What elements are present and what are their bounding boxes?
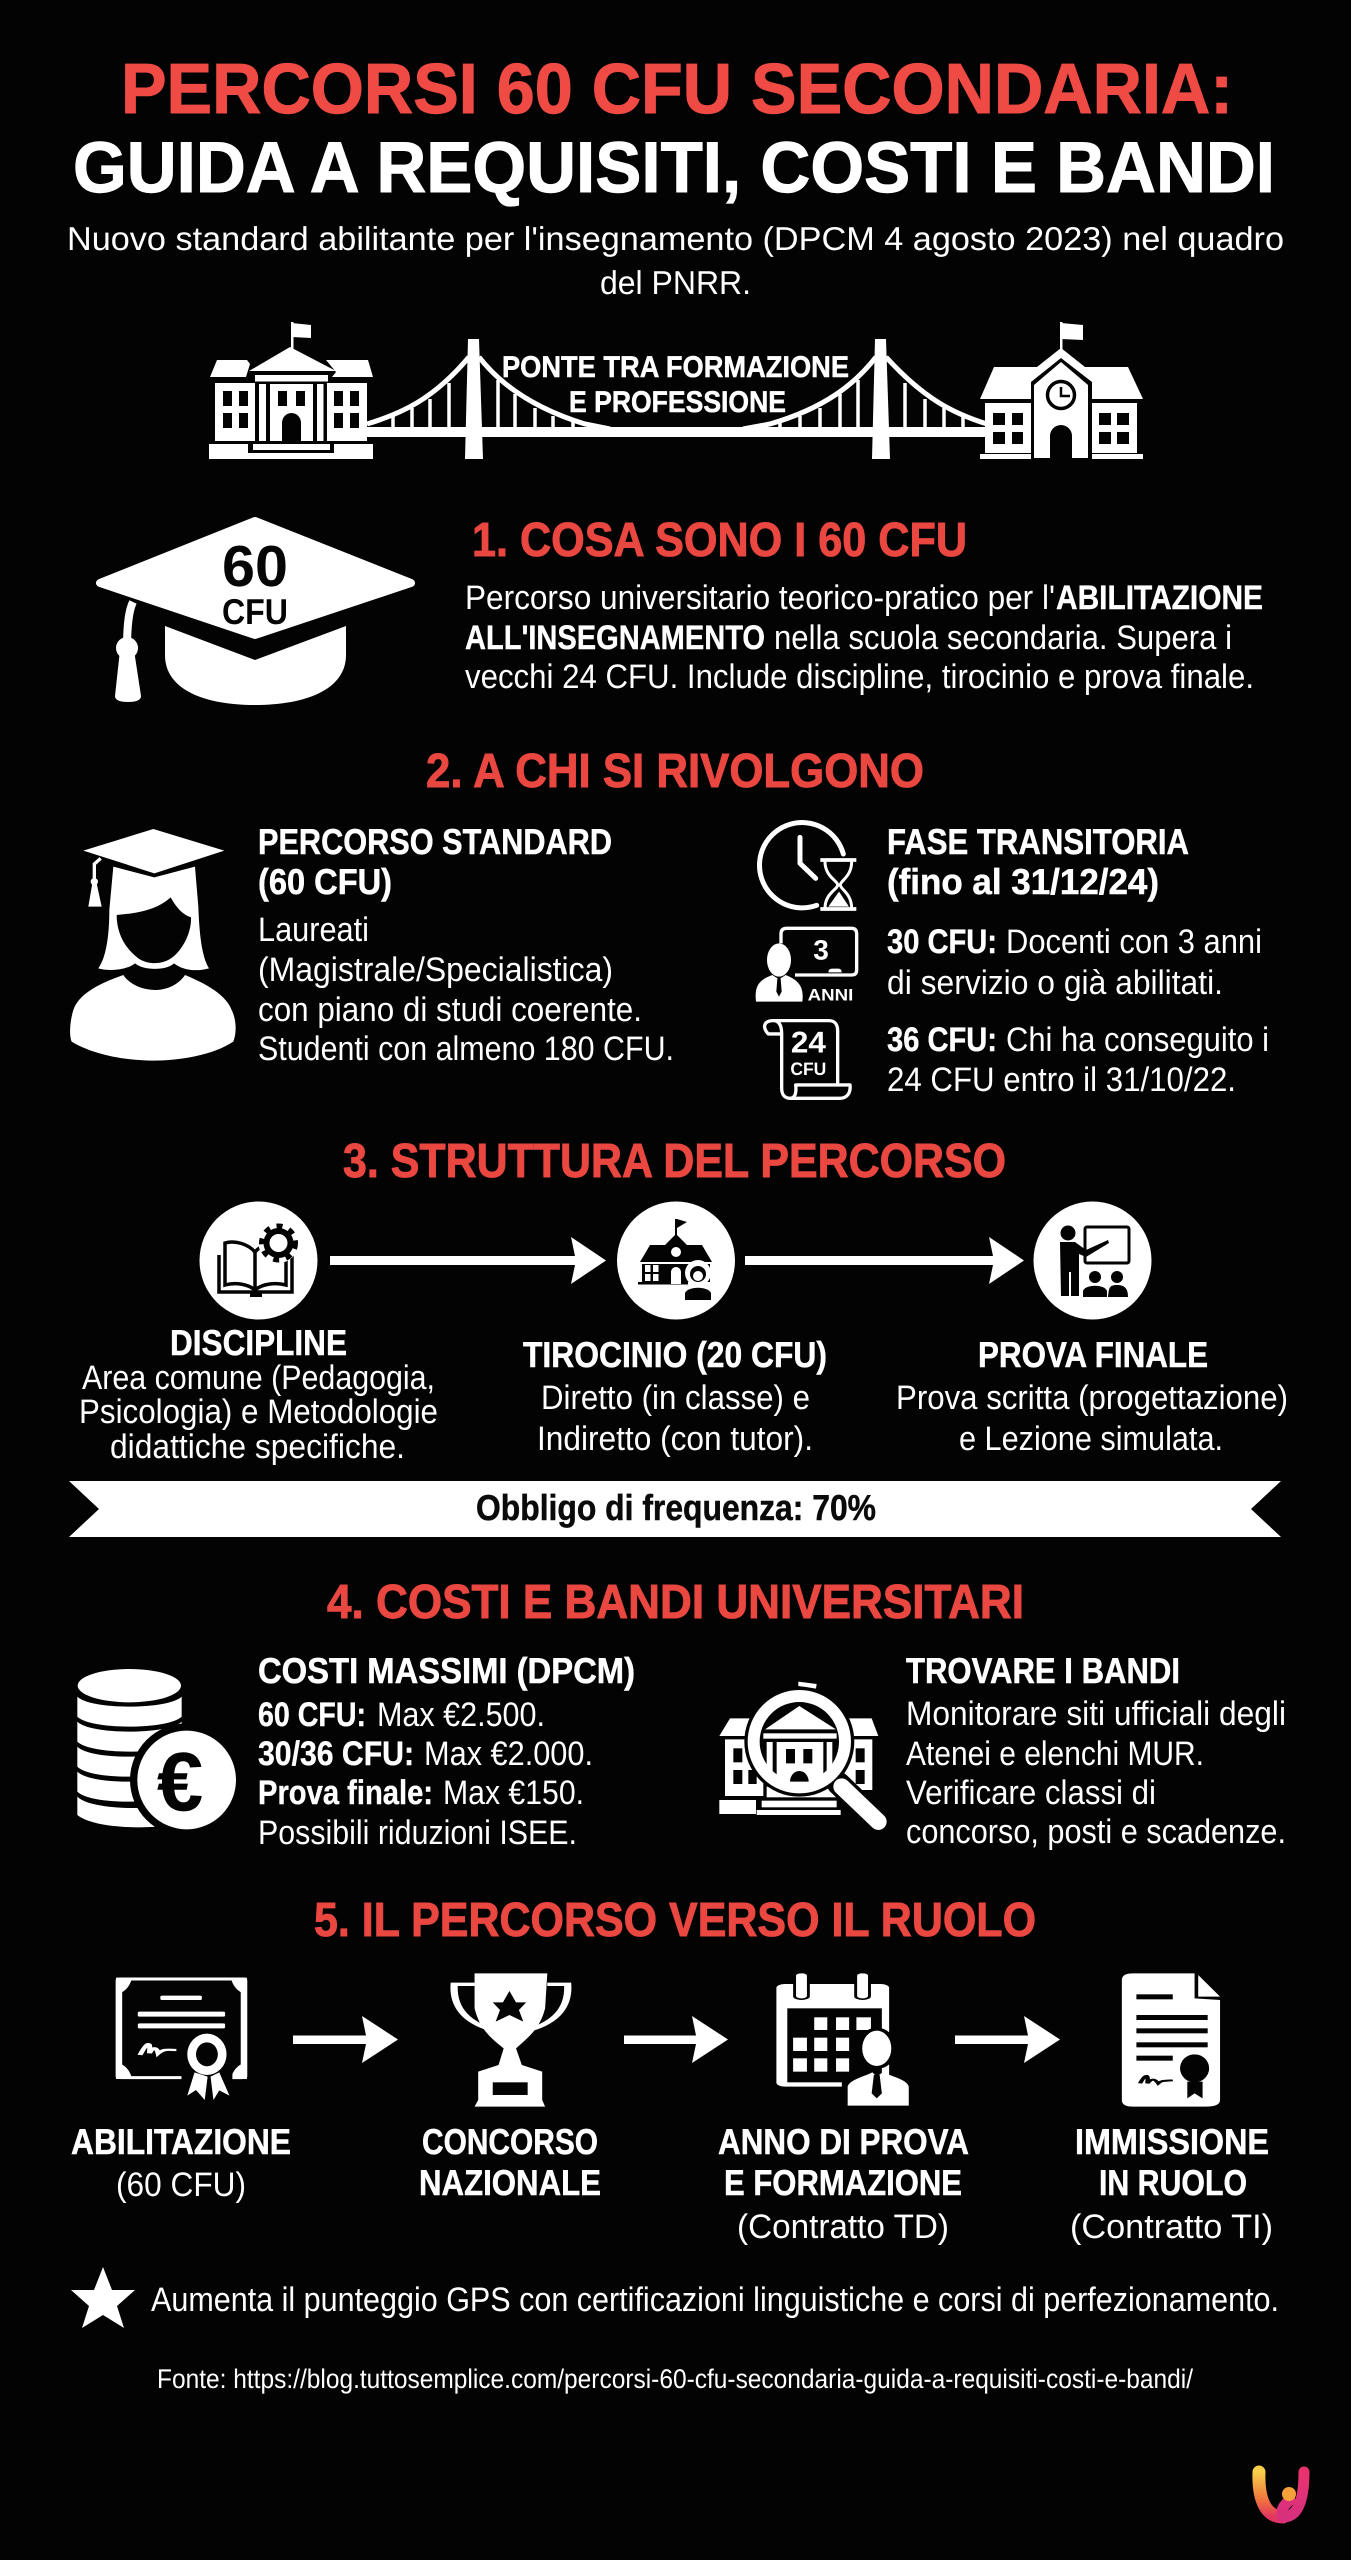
panel: percorso standard: PERCORSO STANDARD bbox=[258, 821, 612, 862]
heading 2: 2. A CHI SI RIVOLGONO bbox=[426, 745, 924, 798]
title bbox=[73, 50, 1275, 208]
icon: bridge between university and school bbox=[209, 322, 1143, 459]
description 1: nella scuola secondaria. Supera i bbox=[774, 619, 1232, 657]
step: discipline bbox=[79, 1322, 438, 1466]
icon: coins with euro: € bbox=[157, 1735, 203, 1828]
step: abilitazione: ABILITAZIONE bbox=[71, 2121, 291, 2162]
section 3 bbox=[69, 1135, 1288, 1537]
section 5 bbox=[71, 1894, 1273, 2246]
icon: suspension bridge bbox=[367, 339, 987, 459]
panel: percorso standard: (Magistrale/Specialistica) bbox=[258, 951, 613, 989]
step: abilitazione bbox=[71, 2121, 291, 2204]
subtitle: Nuovo standard abilitante per l'insegnamento (DPCM 4 agosto 2023) nel quadro bbox=[67, 220, 1284, 257]
section 1 bbox=[100, 514, 1263, 705]
icon: teacher 3 anni: ANNI bbox=[808, 986, 853, 1004]
icon: teacher at board bbox=[1034, 1202, 1152, 1320]
panel: trovare i bandi: Monitorare siti ufficiali degli bbox=[906, 1695, 1286, 1733]
step: tirocinio: Indiretto (con tutor). bbox=[537, 1420, 813, 1458]
heading 4: 4. COSTI E BANDI UNIVERSITARI bbox=[327, 1576, 1024, 1629]
icon: graduate woman bbox=[70, 829, 236, 1061]
step: immissione: IN RUOLO bbox=[1099, 2162, 1247, 2203]
icon: coins with euro bbox=[77, 1669, 243, 1837]
step: tirocinio bbox=[523, 1334, 827, 1458]
bridge label: E PROFESSIONE bbox=[569, 386, 786, 419]
description 1: ABILITAZIONE bbox=[1056, 579, 1263, 617]
panel: costi massimi: Max €150. bbox=[443, 1774, 584, 1812]
step: immissione: IMMISSIONE bbox=[1075, 2121, 1269, 2162]
panel: costi massimi: Max €2.500. bbox=[377, 1696, 545, 1734]
bridge label: PONTE TRA FORMAZIONE bbox=[502, 351, 849, 384]
panel: trovare i bandi: TROVARE I BANDI bbox=[906, 1650, 1180, 1691]
icon: star bbox=[71, 2267, 135, 2328]
step: immissione bbox=[1070, 2121, 1273, 2246]
arrow bbox=[624, 2016, 728, 2063]
description 1: vecchi 24 CFU. Include discipline, tirocinio e prova finale. bbox=[465, 658, 1254, 696]
step: concorso: NAZIONALE bbox=[419, 2162, 601, 2203]
panel: fase transitoria: di servizio o già abilitati. bbox=[887, 964, 1223, 1002]
panel: fase transitoria: (fino al 31/12/24) bbox=[887, 861, 1159, 902]
panel: fase transitoria: FASE TRANSITORIA bbox=[887, 821, 1189, 862]
icon: graduation cap 60 CFU: 60 bbox=[222, 534, 288, 599]
icon: graduation cap 60 CFU: CFU bbox=[222, 591, 288, 632]
arrow bbox=[293, 2016, 398, 2063]
step: prova finale: PROVA FINALE bbox=[978, 1334, 1208, 1375]
step: discipline: Area comune (Pedagogia, bbox=[82, 1359, 435, 1397]
icon: magnifier on university bbox=[719, 1682, 878, 1822]
panel: fase transitoria: Chi ha conseguito i bbox=[1006, 1021, 1269, 1059]
description 1: ALL'INSEGNAMENTO bbox=[465, 619, 765, 657]
icon: university bbox=[209, 322, 373, 459]
panel: percorso standard: (60 CFU) bbox=[258, 861, 392, 902]
panel: percorso standard: Laureati bbox=[258, 911, 369, 949]
panel: percorso standard: con piano di studi coerente. bbox=[258, 991, 642, 1029]
icon: scroll 24 CFU: CFU bbox=[790, 1059, 826, 1079]
icon: clock and hourglass bbox=[759, 823, 856, 909]
source: Fonte: https://blog.tuttosemplice.com/percorsi-60-cfu-secondaria-guida-a-requisiti-costi-e-bandi/ bbox=[157, 2364, 1193, 2394]
step: prova finale bbox=[896, 1334, 1288, 1458]
heading 1: 1. COSA SONO I 60 CFU bbox=[472, 514, 967, 567]
icon: scroll 24 CFU bbox=[765, 1021, 850, 1098]
heading 3: 3. STRUTTURA DEL PERCORSO bbox=[343, 1135, 1006, 1188]
icon: signed contract bbox=[1122, 1973, 1220, 2107]
step: abilitazione: (60 CFU) bbox=[116, 2166, 246, 2204]
step: discipline: Psicologia) e Metodologie bbox=[79, 1393, 438, 1431]
panel: fase transitoria: 36 CFU: bbox=[887, 1021, 997, 1059]
step: prova finale: e Lezione simulata. bbox=[959, 1420, 1223, 1458]
description 1 bbox=[465, 579, 1263, 696]
panel: costi massimi: Max €2.000. bbox=[424, 1735, 593, 1773]
title: PERCORSI 60 CFU SECONDARIA: bbox=[121, 50, 1233, 129]
icon: tirocinio school and person bbox=[617, 1202, 735, 1320]
step: discipline: DISCIPLINE bbox=[170, 1322, 347, 1363]
icon: graduation cap 60 CFU bbox=[100, 521, 411, 705]
panel: costi massimi bbox=[258, 1650, 635, 1852]
section 4 bbox=[77, 1576, 1286, 1852]
ribbon: obbligo di frequenza: Obbligo di frequenza: 70% bbox=[476, 1487, 876, 1528]
icon: discipline book and gear bbox=[200, 1202, 318, 1320]
panel: fase transitoria: 30 CFU: bbox=[887, 923, 997, 961]
step: anno di prova bbox=[718, 2121, 969, 2246]
section 2 bbox=[70, 745, 1269, 1099]
icon: trophy bbox=[454, 1973, 568, 2107]
step: anno di prova: E FORMAZIONE bbox=[724, 2162, 962, 2203]
panel: costi massimi: 60 CFU: bbox=[258, 1696, 366, 1734]
step: anno di prova: ANNO DI PROVA bbox=[718, 2121, 969, 2162]
panel: costi massimi: Prova finale: bbox=[258, 1774, 433, 1812]
tip with star bbox=[71, 2267, 1279, 2328]
step: discipline: didattiche specifiche. bbox=[110, 1428, 405, 1466]
step: tirocinio: TIROCINIO (20 CFU) bbox=[523, 1334, 827, 1375]
icon: teacher 3 anni: 3 bbox=[813, 934, 829, 966]
step: immissione: (Contratto TI) bbox=[1070, 2208, 1273, 2246]
arrow bbox=[745, 1237, 1024, 1284]
icon: calendar and person bbox=[776, 1972, 911, 2107]
panel: costi massimi: 30/36 CFU: bbox=[258, 1735, 414, 1773]
panel: fase transitoria bbox=[887, 821, 1269, 1099]
icon: logo bbox=[1259, 2472, 1304, 2517]
arrow bbox=[955, 2016, 1060, 2063]
subtitle: del PNRR. bbox=[600, 264, 751, 301]
panel: fase transitoria: Docenti con 3 anni bbox=[1006, 923, 1262, 961]
step: anno di prova: (Contratto TD) bbox=[737, 2208, 949, 2246]
panel: trovare i bandi: Verificare classi di bbox=[906, 1774, 1156, 1812]
panel: trovare i bandi: Atenei e elenchi MUR. bbox=[906, 1735, 1204, 1773]
title: GUIDA A REQUISITI, COSTI E BANDI bbox=[73, 128, 1275, 208]
icon: teacher 3 anni bbox=[756, 928, 857, 1004]
panel: trovare i bandi: concorso, posti e scadenze. bbox=[906, 1813, 1286, 1851]
panel: costi massimi: Possibili riduzioni ISEE. bbox=[258, 1814, 577, 1852]
panel: percorso standard bbox=[258, 821, 674, 1068]
heading 5: 5. IL PERCORSO VERSO IL RUOLO bbox=[314, 1894, 1036, 1947]
step: tirocinio: Diretto (in classe) e bbox=[541, 1379, 810, 1417]
step: concorso bbox=[419, 2121, 601, 2203]
panel: trovare i bandi bbox=[906, 1650, 1286, 1851]
bridge label bbox=[502, 351, 849, 419]
icon: diploma bbox=[116, 1978, 247, 2100]
subtitle bbox=[67, 220, 1284, 301]
panel: costi massimi: COSTI MASSIMI (DPCM) bbox=[258, 1650, 635, 1691]
arrow bbox=[330, 1237, 606, 1284]
ribbon: obbligo di frequenza bbox=[69, 1481, 1281, 1537]
icon: scroll 24 CFU: 24 bbox=[791, 1026, 826, 1059]
panel: percorso standard: Studenti con almeno 180 CFU. bbox=[258, 1030, 674, 1068]
description 1: Percorso universitario teorico-pratico per l' bbox=[465, 579, 1055, 617]
step: prova finale: Prova scritta (progettazione) bbox=[896, 1379, 1288, 1417]
panel: fase transitoria: 24 CFU entro il 31/10/22. bbox=[887, 1061, 1236, 1099]
step: concorso: CONCORSO bbox=[422, 2121, 598, 2162]
icon: school bbox=[980, 322, 1143, 459]
